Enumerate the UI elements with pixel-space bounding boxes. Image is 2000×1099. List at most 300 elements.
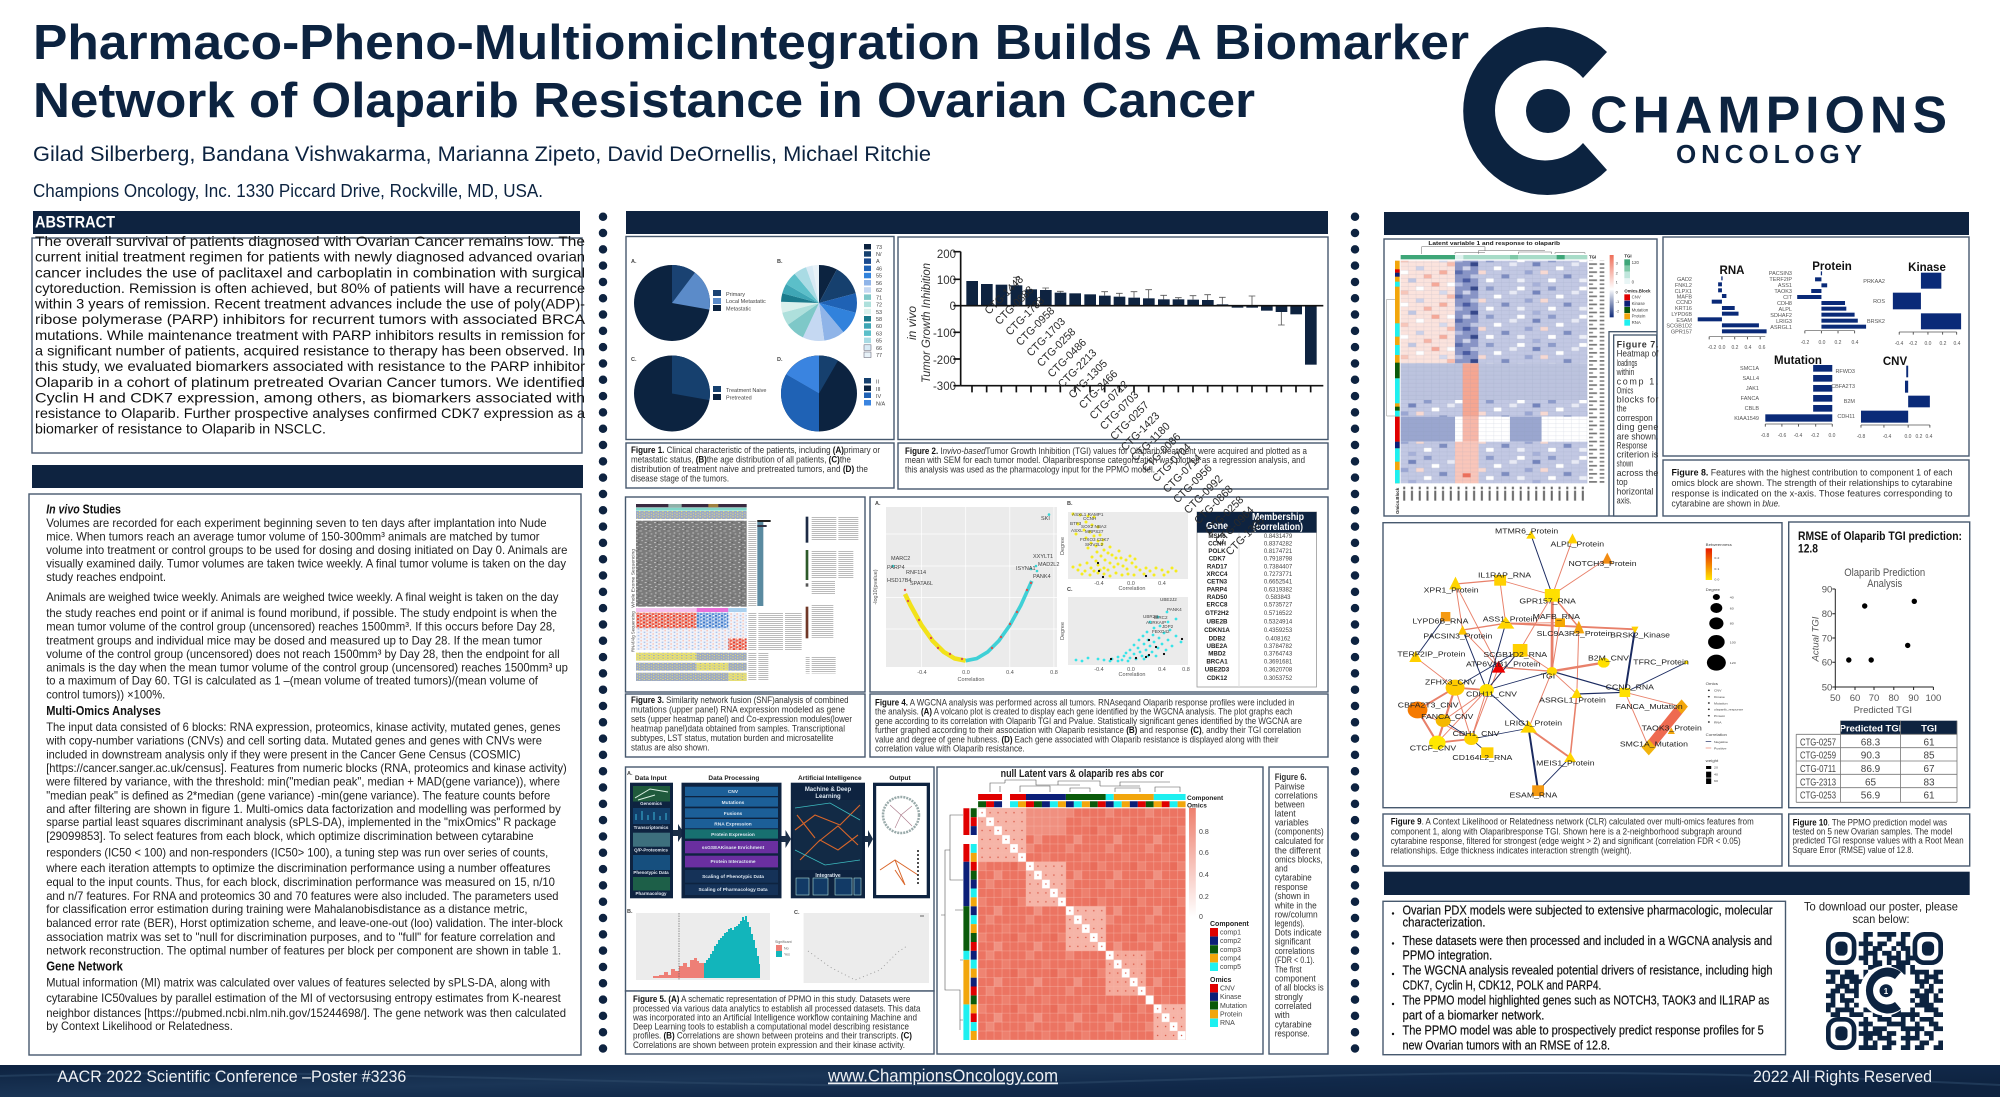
caption: figure 8: omics block are shown. The strength of their relationships to cytarabine: [1672, 478, 1952, 489]
histogram B: Significant: [775, 940, 792, 944]
methods text: animals is the day when the mean tumor volume of the control group (uncensored) reaches 1500mm³ up: [46, 660, 568, 674]
caption: figure 10: [1789, 814, 1970, 866]
QR centre logo: 1: [1884, 987, 1889, 996]
panel: figure 6 caption: [1269, 767, 1328, 1054]
table D: gene membership: 0.583843: [1265, 595, 1291, 601]
table D: gene membership: 0.8374282: [1264, 542, 1293, 548]
table D: gene membership: DDB2: [1209, 636, 1226, 643]
colour scale: 0.6: [1199, 850, 1209, 857]
abstract text: [34, 233, 586, 437]
abstract heading bar: ABSTRACT: [35, 212, 116, 232]
panel: figure 6 caption: cytarabine: [1275, 873, 1312, 883]
column: artificial intelligence: [791, 775, 865, 898]
panel: figure 6 caption: legends).: [1275, 918, 1305, 928]
caption: figure 10: tested on 5 new Ovarian samples. The model: [1793, 827, 1952, 838]
chart: CNV: CBFA2T3: [1831, 384, 1855, 390]
caption: figure 4: further graphed according to their association with Olaparib resistance (B) and response (C), andby their TGI correlation: [875, 725, 1301, 736]
table D: gene membership: RAD17: [1207, 563, 1228, 570]
pie B legend: 55: [876, 274, 882, 280]
network legend: Protein: [1714, 714, 1725, 718]
network legend: 100: [1730, 641, 1736, 644]
pie B legend: 71: [876, 296, 882, 302]
abstract text: Olaparib in a cohort of platinum pretreated Ovarian Cancer tumors. We identified: [35, 374, 585, 390]
caption: figure 8: [1663, 460, 1969, 516]
left dendrogram: [1387, 299, 1395, 416]
abstract text panel: [32, 238, 582, 453]
chart: Protein: ALPL: [1779, 307, 1792, 313]
top annotation strips: [978, 794, 1186, 807]
volcano plot A: 0.8: [1050, 670, 1058, 676]
methods text: cytarabine IC50values by parallel estimation of the MI of vectorsusing entropy estimates from K-nearest: [46, 991, 561, 1005]
conclusions heading bar: [1384, 872, 1970, 895]
figure 2 x axis labels overflowing across panels: CTG-0712: [1088, 379, 1131, 422]
prediction table: 61: [1923, 791, 1935, 802]
caption: figure 3: mutations (upper panel) RNA expression modeled as gene: [631, 705, 845, 716]
panel: figure 6 caption: latent: [1275, 809, 1296, 819]
y axis labels: 0: [950, 301, 956, 313]
panel: figure 6 caption: component: [1275, 974, 1316, 984]
column: artificial intelligence: Learning: [815, 794, 841, 800]
caption: figure 4: value and degree of gene hubness. (D) Each gene associated with Olaparib resistance is displayed along with their: [875, 734, 1279, 745]
logo: Champions Oncology: CHAMPIONS: [1590, 86, 1947, 144]
chart: Mutation: SALL4: [1742, 376, 1759, 382]
chart: Kinase: -0.4: [1895, 341, 1904, 347]
figure 2 x axis labels overflowing across panels: CTG-2213: [1056, 347, 1099, 390]
bullet text: The PPMO model was able to prospectively predict response profiles for 5: [1402, 1024, 1764, 1038]
column: data processing: Scaling of Phenotypic Data: [702, 874, 764, 880]
table D: gene membership: 0.408162: [1265, 637, 1291, 643]
chart: Protein: ASRGL1: [1770, 325, 1792, 331]
caption: figure 5: [626, 991, 934, 1054]
table D: gene membership: 0.4359253: [1264, 628, 1293, 634]
chart: Protein: LRIG3: [1776, 319, 1792, 325]
column: artificial intelligence: Machine & Deep: [805, 787, 852, 793]
annotation labels: Omics: [1187, 802, 1207, 810]
prediction table: CTG-0711: [1800, 764, 1836, 775]
pie B legend: 53: [876, 310, 882, 316]
column: data processing: ssGSEAKinase Enrichment: [702, 845, 765, 851]
network labels: PACSIN3_Protein: [1423, 632, 1492, 640]
pie B: B.: [777, 259, 783, 265]
QR download prompt: [1804, 900, 1958, 926]
colour scale: 3: [1616, 261, 1619, 266]
y axis title: Tumor Growth Inhibition: [919, 263, 933, 383]
scatter chart: Analysis: [1867, 578, 1903, 590]
network legend: 40: [1730, 596, 1734, 599]
network legend: Degree: [1706, 587, 1721, 592]
panel: figure 6 caption: between: [1275, 799, 1305, 809]
table D: gene membership: 0.6319382: [1264, 587, 1293, 593]
scatter plot B: 0.4: [1158, 581, 1166, 587]
panel: figure 6 caption: correlations: [1275, 946, 1315, 956]
table D: gene membership: 0.3691681: [1264, 659, 1293, 665]
chart: CNV: B2M: [1844, 399, 1855, 405]
table D: gene membership: CDK7: [1209, 556, 1226, 563]
panel: figure 6 caption: response: [1275, 882, 1308, 892]
colour scale: 0.2: [1199, 894, 1209, 901]
network legend: Mutation: [1714, 702, 1728, 705]
pie D: N/A: [876, 402, 886, 408]
scatter plot B: -0.4: [1094, 581, 1104, 587]
network legend: 0.1: [1714, 567, 1720, 571]
network legend: RNA: [1714, 721, 1722, 724]
methods text: balanced error rate (BER), Horst optimization scheme, and leave-one-out (loo) validation. The inter-block: [46, 916, 564, 930]
chart: Protein: Protein: [1812, 261, 1852, 273]
prediction table: 67: [1923, 764, 1935, 775]
panel: figure 6 caption: of all blocks is: [1275, 983, 1324, 993]
chart: Mutation: -0.4: [1794, 433, 1803, 439]
column: data processing: [682, 775, 782, 898]
panel: figure 6 caption: Pairwise: [1275, 781, 1305, 791]
figure 2 x axis labels overflowing across panels: CTG-1305: [1224, 515, 1267, 558]
chart: Protein: TERF2IP: [1769, 277, 1792, 283]
scatter plot C: C.: [1067, 587, 1073, 593]
caption: figure 2: this analysis was used as the pharmacology input for the PPMO model.: [905, 464, 1155, 475]
y axis title: [905, 263, 933, 383]
pie B legend: [864, 244, 882, 359]
methods text: The input data consisted of 6 blocks: RNA expression, proteomics, kinase activity, mutated genes, genes: [46, 720, 560, 734]
caption: figure 7: [1609, 332, 1659, 516]
figure 2 x axis labels overflowing across panels: CTG-0257: [1108, 399, 1152, 443]
network legend: weight: [1706, 758, 1719, 763]
caption: figure 10: Square Error (RMSE) value of 12.8.: [1793, 845, 1914, 856]
caption: figure 9: relationships. Edge thickness indicates interaction strength (weight).: [1391, 845, 1632, 856]
table D: gene membership: CDK12: [1207, 675, 1228, 682]
methods text: mean tumor volume of the control group (uncensored) reaches 1500mm³. If this occurs before Day 28,: [46, 620, 555, 634]
column: data input: Q/P-Proteomics: [634, 848, 668, 852]
figure 2 x axis labels overflowing across panels: CTG-1448: [983, 274, 1026, 317]
colour scale: -1: [1616, 299, 1620, 304]
arrow: [673, 824, 684, 842]
network labels: XPR1_Protein: [1424, 586, 1479, 594]
methods text: visually examined daily. Tumor volumes are taken twice weekly. A final tumor volume is taken on the day: [46, 556, 566, 570]
caption: figure 7: Heatmap of: [1617, 349, 1659, 359]
table D: gene membership: 0.3620708: [1264, 668, 1293, 674]
figure 2 x axis labels overflowing across panels: CTG-2466: [1077, 368, 1120, 411]
methods text: by Context Likelihood or Relatedness.: [46, 1019, 233, 1033]
caption: figure 10: predicted TGI response values with a Root Mean: [1793, 836, 1964, 847]
prediction table: 61: [1923, 737, 1935, 748]
heading: RMSE of Olaparib TGI prediction:: [1798, 529, 1962, 543]
scatter plot C: -0.4: [1094, 667, 1104, 673]
scatter chart: 90: [1822, 584, 1832, 596]
table D: gene membership: UBE2A: [1207, 643, 1228, 650]
chart: Protein: [1769, 261, 1859, 346]
chart: Mutation: FANCA: [1741, 396, 1759, 402]
pie A: Metastatic: [726, 306, 751, 312]
scatter plot C: Degree: [1060, 622, 1066, 640]
caption: figure 5: profiles. (B) Correlations are shown between proteins and their transcripts. (C): [633, 1031, 912, 1042]
panel: figure 6 correlation heatmap: [937, 767, 1263, 1054]
caption: figure 1: disease stage of the tumors.: [631, 474, 729, 485]
logo: Champions Oncology: [1463, 27, 1947, 195]
caption: figure 1: [626, 443, 894, 488]
network labels: CDH11_CNV: [1466, 690, 1518, 698]
row and column labels: [1395, 261, 1604, 514]
caption: figure 3: sets (upper heatmap panel) and Co-expression modules(lower: [631, 714, 853, 725]
methods heading bar: [32, 465, 583, 488]
caption: figure 9: cytarabine response, filtered for strongest (edge weight > 2) and significant (correlation FDR < 0.05): [1391, 836, 1741, 847]
network labels: ESAM_RNA: [1509, 791, 1558, 799]
annotation labels: [1187, 795, 1224, 810]
network labels: B2M_CNV: [1588, 654, 1630, 662]
methods text: [45, 503, 568, 1033]
scatter chart: 60: [1822, 658, 1832, 668]
pie B legend: 63: [876, 332, 882, 338]
network labels: CD164L2_RNA: [1452, 754, 1513, 762]
pie B legend: 66: [876, 346, 882, 352]
panel: figure 10 prediction: [1789, 522, 1970, 808]
chart: Protein: TAOK3: [1774, 289, 1792, 295]
scatter plot C: 0.4: [1158, 667, 1166, 673]
figure 2 x axis labels overflowing across panels: CTG-0964: [1213, 504, 1257, 548]
figure 2 x axis labels overflowing across panels: CTG-0958: [1014, 305, 1057, 348]
chart: Kinase: [1863, 262, 1961, 347]
methods text: association matrix was set to "null for discrimination purposes, and to "full" for feature correlation and: [46, 930, 555, 944]
panel: figure 6 caption: the different: [1275, 845, 1321, 855]
panel: figure 6 caption: variables: [1275, 818, 1309, 828]
bullet text: CDK7, Cyclin H, CDK12, POLK and PARP4.: [1402, 979, 1601, 993]
chart: Mutation: -0.8: [1761, 433, 1770, 439]
caption: figure 2: mean with SEM for each tumor model. Olaparibresponse categorization was plotted as a regression analysis, and: [905, 455, 1305, 466]
prediction table: Predicted TGI: [1840, 724, 1901, 734]
arrow: [865, 830, 873, 848]
methods text: network reconstruction. The optimal number of features per block per component are shown in table 1.: [46, 944, 561, 958]
volcano plot A: SPATA6L: [910, 581, 933, 587]
caption: figure 3: status are also shown.: [631, 743, 710, 754]
legend: Kinase: [1632, 301, 1645, 306]
pie B: [777, 244, 882, 359]
scatter chart: 70: [1869, 693, 1879, 704]
bullet markers: [1392, 914, 1394, 1034]
methods text: study reaches endpoint.: [46, 570, 166, 584]
panel: figure 6 caption: strongly: [1275, 992, 1303, 1002]
legend: omics: Omics: [1210, 977, 1232, 984]
table D: gene membership: 0.6652541: [1264, 580, 1293, 586]
network labels: [1397, 527, 1702, 799]
pie D: II: [876, 380, 880, 386]
bullet text: characterization.: [1402, 916, 1486, 930]
panel: conclusions: [1383, 901, 1786, 1055]
volcano plot A: MARC2: [891, 556, 910, 562]
table D: gene membership: UBE2B: [1207, 618, 1228, 625]
network legend: 40: [1714, 773, 1718, 776]
chart: RNA: MAFB: [1677, 294, 1692, 300]
scatter chart: Olaparib Prediction: [1844, 567, 1925, 579]
chart: Kinase: 0.2: [1940, 341, 1947, 347]
chart: Mutation: Mutation: [1774, 355, 1822, 367]
legend: Omics.Block: [1624, 288, 1651, 293]
table D: gene membership: PARP4: [1207, 586, 1228, 593]
annotation labels: Component: [1187, 795, 1224, 802]
heatmap title: null Latent vars & olaparib res abs cor: [1001, 768, 1164, 780]
histogram B: No: [784, 946, 789, 950]
pie A: Local Metastatic: [726, 299, 766, 305]
chart: Mutation: KIAA1549: [1734, 416, 1759, 422]
TGI annotation strip: TGI: [1589, 255, 1596, 260]
row and column labels: Omics.Block: [1395, 487, 1400, 514]
pie B legend: 73: [876, 245, 882, 251]
methods text: where each iteration attempts to optimize the discrimination performance using a number offeatures: [45, 861, 550, 875]
y axis labels: -300: [933, 381, 956, 393]
figure 2 x axis labels overflowing across panels: CTG-0258: [1035, 326, 1078, 369]
figure 2 x axis labels overflowing across panels: CTG-0956: [1171, 462, 1215, 506]
panel: figure 6 caption: (components): [1275, 827, 1324, 837]
chart: Protein: ASS1: [1778, 283, 1792, 289]
network legend: Positive: [1714, 747, 1727, 750]
logo: Champions Oncology: ONCOLOGY: [1676, 139, 1862, 169]
column: data input: Genomics: [640, 801, 662, 806]
scatter chart: 100: [1925, 693, 1941, 704]
figure 2 x axis labels overflowing across panels: CTG-0992: [1182, 473, 1225, 516]
volcano plot A: 0.0: [962, 670, 970, 676]
scatter plot B: SOX2 NBA2: [1081, 524, 1107, 529]
QR download prompt: scan below:: [1852, 912, 1910, 926]
panel: figure 6 caption: omics blocks,: [1275, 854, 1323, 864]
caption: figure 7: comp 1.: [1617, 376, 1658, 386]
top dendrogram: [990, 780, 1180, 792]
network legend: Omics: [1706, 681, 1718, 686]
panel: figure 5 PPMO schematic: A.: [627, 771, 633, 777]
bullet text: These datasets were then processed and included in a WGCNA analysis and: [1402, 934, 1772, 948]
network legend: Betweenness: [1706, 542, 1732, 547]
abstract text: cytoreduction. Remission is often achieved, but 80% of patients will have a recurrence: [35, 280, 585, 296]
legend: TGI: [1624, 253, 1632, 258]
volcano plot A: MAD2L2: [1038, 562, 1059, 568]
top dendrogram: [1422, 247, 1585, 254]
prediction table: CTG-0253: [1800, 791, 1836, 802]
footer: rights: 2022 All Rights Reserved: [1753, 1067, 1932, 1086]
caption: figure 7: blocks for: [1617, 395, 1658, 405]
network labels: NOTCH3_Protein: [1569, 560, 1637, 568]
pie B legend: 77: [876, 353, 882, 359]
legend: component: comp4: [1220, 956, 1241, 962]
caption: figure 8: cytarabine are shown in blue.: [1672, 498, 1780, 509]
pie B legend: 56: [876, 281, 882, 287]
caption: figure 3: subtypes, LST status, mutation burden and microsatellite: [631, 733, 834, 744]
caption: figure 7: ding gene: [1617, 422, 1658, 432]
panel: figure 4 WGCNA: [870, 497, 1328, 692]
scatter plot B: CCNH: [1083, 516, 1096, 521]
bars and axes: [953, 252, 1323, 392]
prediction table: 56.9: [1861, 791, 1881, 802]
network labels: FANCA_CNV: [1421, 713, 1474, 721]
legend: omics: Protein: [1220, 1012, 1242, 1018]
left annotation: [1395, 261, 1400, 483]
methods text: In vivo Studies: [46, 503, 121, 517]
table D: gene membership: 0.5324914: [1264, 619, 1293, 625]
methods text: Gene Network: [46, 960, 123, 974]
panel: figure 5 PPMO schematic: [626, 767, 934, 991]
scatter chart: 90: [1908, 693, 1919, 704]
legend: component: comp2: [1220, 938, 1241, 945]
table D: gene membership: POLK: [1208, 548, 1226, 555]
caption: figure 8: Figure 8. Features with the highest contribution to component 1 of each: [1672, 468, 1952, 479]
panel: figure 3 SNF heatmap: [626, 497, 865, 692]
pie B legend: 58: [876, 317, 882, 323]
network labels: ZFHX3_CNV: [1425, 678, 1476, 686]
panel: figure 6 caption: The first: [1275, 964, 1302, 974]
scatter plot B: FOXO3 CDK7: [1080, 537, 1110, 542]
network edges positive: [1416, 539, 1682, 758]
heatmap graphic: RNAfAlg Sequencing: [630, 611, 635, 652]
caption: figure 3: heatmap panel)data obtained from samples. Transcriptional: [631, 724, 845, 735]
table D: gene membership: ERCC8: [1207, 602, 1228, 609]
chart: RNA: GAD2: [1677, 277, 1692, 283]
methods text: treatment groups and individual mice may be dosed and measured up to Day 28. If the mean tumor: [46, 633, 542, 647]
panel: figure 6 caption: (FDR < 0.1).: [1275, 955, 1315, 965]
network legend: Kinase: [1714, 695, 1725, 699]
figure 2 x axis labels overflowing across panels: CTG-1703: [1025, 316, 1068, 359]
chart: CNV: -0.4: [1883, 434, 1892, 440]
caption: figure 7: are shown.: [1617, 431, 1658, 441]
table D: gene membership: 0.8174721: [1264, 549, 1293, 555]
figure 2 x axis labels overflowing across panels: CTG-1788: [1004, 295, 1047, 338]
scatter plot B: SKIV2L2: [1085, 542, 1104, 547]
caption: figure 4: gene according to its correlation with Olaparib TGI and Pvalue. Statistically significant genes identified by the WGCNA are: [875, 716, 1302, 727]
methods text: volume into treatment or control groups to be used for dosing and dosing initiated on Day 0. Animals are: [46, 543, 568, 557]
chart: Protein: CDH8: [1777, 301, 1792, 307]
network labels: SCGB1D2_RNA: [1483, 651, 1548, 659]
dotted column divider left: [599, 217, 607, 1052]
figure 2 x axis labels overflowing across panels: CTG-1423: [1119, 410, 1162, 453]
figure 2 x axis labels overflowing across panels: CTG-0704: [1150, 441, 1194, 485]
legend: component: comp3: [1220, 947, 1241, 954]
bars: [1698, 271, 1961, 428]
methods text: "median peak" is defined as 2*median (gene variance) -min(gene variance). The feature counts before: [46, 788, 551, 802]
abstract text: cancer includes the use of paclitaxel and carboplatin in combination with surgical: [35, 264, 585, 280]
volcano plot A: -log10(pvalue): [873, 569, 879, 605]
network labels: SLC9A3R2_Protein: [1537, 630, 1612, 638]
panel: figure 6 caption: correlations: [1275, 790, 1318, 800]
caption: figure 5: Deep Learning tools to establish a computational model describing resistance: [633, 1022, 909, 1033]
caption: figure 7: correspon: [1617, 413, 1653, 423]
histogram B: B.: [627, 909, 633, 915]
scatter plot C: Correlation: [1119, 672, 1145, 678]
network legend: 60: [1714, 779, 1718, 783]
prediction table: 68.3: [1861, 737, 1881, 748]
scatter plot C: AURKAIP: [1146, 620, 1166, 625]
chart: RNA: SCGB1D2: [1666, 324, 1692, 330]
chart: Mutation: 0.0: [1829, 433, 1836, 439]
y axis labels: 100: [937, 275, 956, 287]
network legend: 0.2: [1714, 556, 1720, 560]
network legend: Correlation: [1706, 732, 1727, 737]
chart: Mutation: [1734, 355, 1836, 439]
chart: RNA: 0.0: [1719, 345, 1726, 351]
network edges negative: [1416, 535, 1686, 791]
methods text: [https://cancer.sanger.ac.uk/census]. Features from numeric blocks (RNA, proteomics and kinase activity): [46, 761, 567, 775]
chart: Kinase: PRKAA2: [1863, 279, 1885, 285]
caption: figure 3: [626, 694, 865, 757]
chart: CNV: 0.0: [1905, 434, 1912, 440]
chart: Mutation: -0.2: [1811, 433, 1820, 439]
histogram B: [627, 909, 792, 980]
dotted column divider right: [1351, 217, 1359, 1052]
volcano plot A: [873, 501, 1059, 683]
pie C: C.: [631, 357, 637, 363]
bullet text: The PPMO model highlighted genes such as NOTCH3, TAOK3 and IL1RAP as: [1402, 994, 1769, 1008]
table D: gene membership: XRCC4: [1207, 571, 1228, 578]
caption: figure 7: Figure 7.: [1617, 340, 1658, 350]
chart: Protein: CIT: [1783, 295, 1793, 301]
table D: gene membership: RAD50: [1207, 594, 1228, 601]
methods text: Volumes are recorded for each experiment beginning seven to ten days after implantation into Nude: [46, 516, 547, 530]
caption: figure 7: within: [1616, 367, 1634, 377]
chart: RNA: CCND: [1676, 300, 1692, 306]
colour scale: 0.4: [1199, 872, 1209, 879]
table D: gene membership: MSH6: [1208, 533, 1226, 540]
